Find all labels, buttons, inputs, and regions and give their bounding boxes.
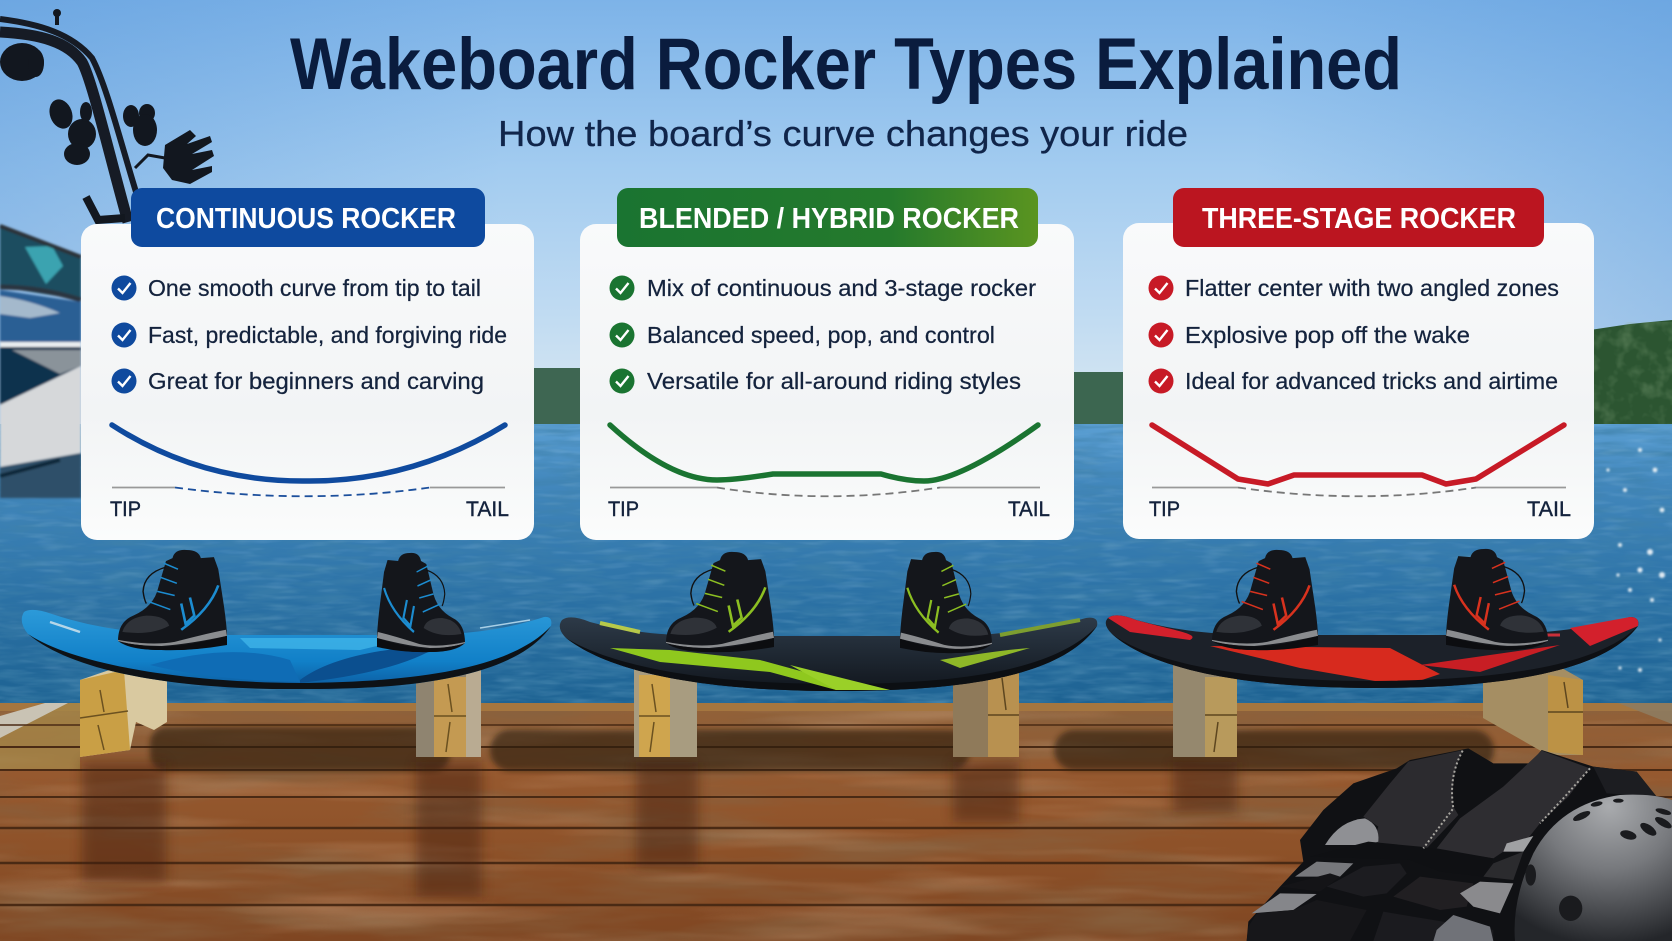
wood block: board 2 right <box>953 670 1019 757</box>
wood block: board 1 left <box>80 665 167 757</box>
water sparkle <box>1606 448 1665 672</box>
heading badge: three-stage <box>1173 188 1544 247</box>
bullet: mix of continuous: Mix of continuous and 3-stage rocker <box>647 275 1036 301</box>
dock deck <box>0 703 1672 941</box>
rocker diagram: three-stage: TAIL <box>1527 498 1571 521</box>
subtitle: How the board’s curve changes your ride <box>498 113 1188 154</box>
rocker diagram: blended: TAIL <box>1008 498 1050 521</box>
bullet: one smooth curve: One smooth curve from tip to tail <box>148 275 481 301</box>
rocker diagram: three-stage <box>1149 425 1571 521</box>
bullet: balanced speed: Balanced speed, pop, and control <box>647 322 995 348</box>
rocker diagram: continuous: TAIL <box>466 498 509 521</box>
background: water <box>0 424 1672 706</box>
rocker diagram: continuous <box>110 425 509 521</box>
boat tower <box>0 9 214 222</box>
bullet: fast predictable: Fast, predictable, and forgiving ride <box>148 322 507 348</box>
boat <box>0 226 81 498</box>
panel: blended hybrid rocker <box>580 188 1074 540</box>
panel: continuous rocker <box>81 188 534 540</box>
bullet: versatile: Versatile for all-around riding styles <box>647 368 1021 394</box>
deck reflections of blocks <box>82 762 1237 897</box>
bullet: explosive pop: Explosive pop off the wake <box>1185 322 1470 348</box>
boots: green board <box>666 552 992 653</box>
background: sky <box>0 0 1672 430</box>
heading badge: continuous rocker: CONTINUOUS ROCKER <box>156 203 456 235</box>
title: Wakeboard Rocker Types Explained <box>290 24 1402 105</box>
rocker diagram: blended: TIP <box>608 498 639 521</box>
rocker diagram: three-stage: TIP <box>1149 498 1180 521</box>
heading badge: three-stage: THREE-STAGE ROCKER <box>1202 203 1516 235</box>
bullet: flatter center: Flatter center with two angled zones <box>1185 275 1559 301</box>
rocker diagram: continuous: TIP <box>110 498 141 521</box>
heading badge: blended hybrid <box>617 188 1038 247</box>
life vest <box>1247 748 1672 941</box>
boots: blue board <box>118 550 465 652</box>
panel: three-stage rocker <box>1123 188 1594 539</box>
wood block: board 2 left <box>634 665 697 757</box>
wood block: board 3 right <box>1483 667 1583 755</box>
bullet: ideal for advanced: Ideal for advanced tricks and airtime <box>1185 368 1558 394</box>
rocker diagram: blended <box>608 425 1050 521</box>
boots: red board <box>1212 549 1548 650</box>
bullet: great for beginners: Great for beginners and carving <box>148 368 484 394</box>
wakeboard: blue <box>22 610 551 689</box>
wakeboard: green <box>560 617 1097 691</box>
wakeboard: red <box>1106 615 1638 688</box>
heading badge: continuous rocker <box>131 188 485 247</box>
background: far shoreline trees <box>530 320 1672 426</box>
wood block: board 1 right <box>416 663 481 757</box>
wood block: board 3 left <box>1173 661 1237 757</box>
heading badge: blended hybrid: BLENDED / HYBRID ROCKER <box>639 203 1019 235</box>
helmet <box>1515 795 1672 941</box>
deck shadows under boards <box>150 727 1494 771</box>
